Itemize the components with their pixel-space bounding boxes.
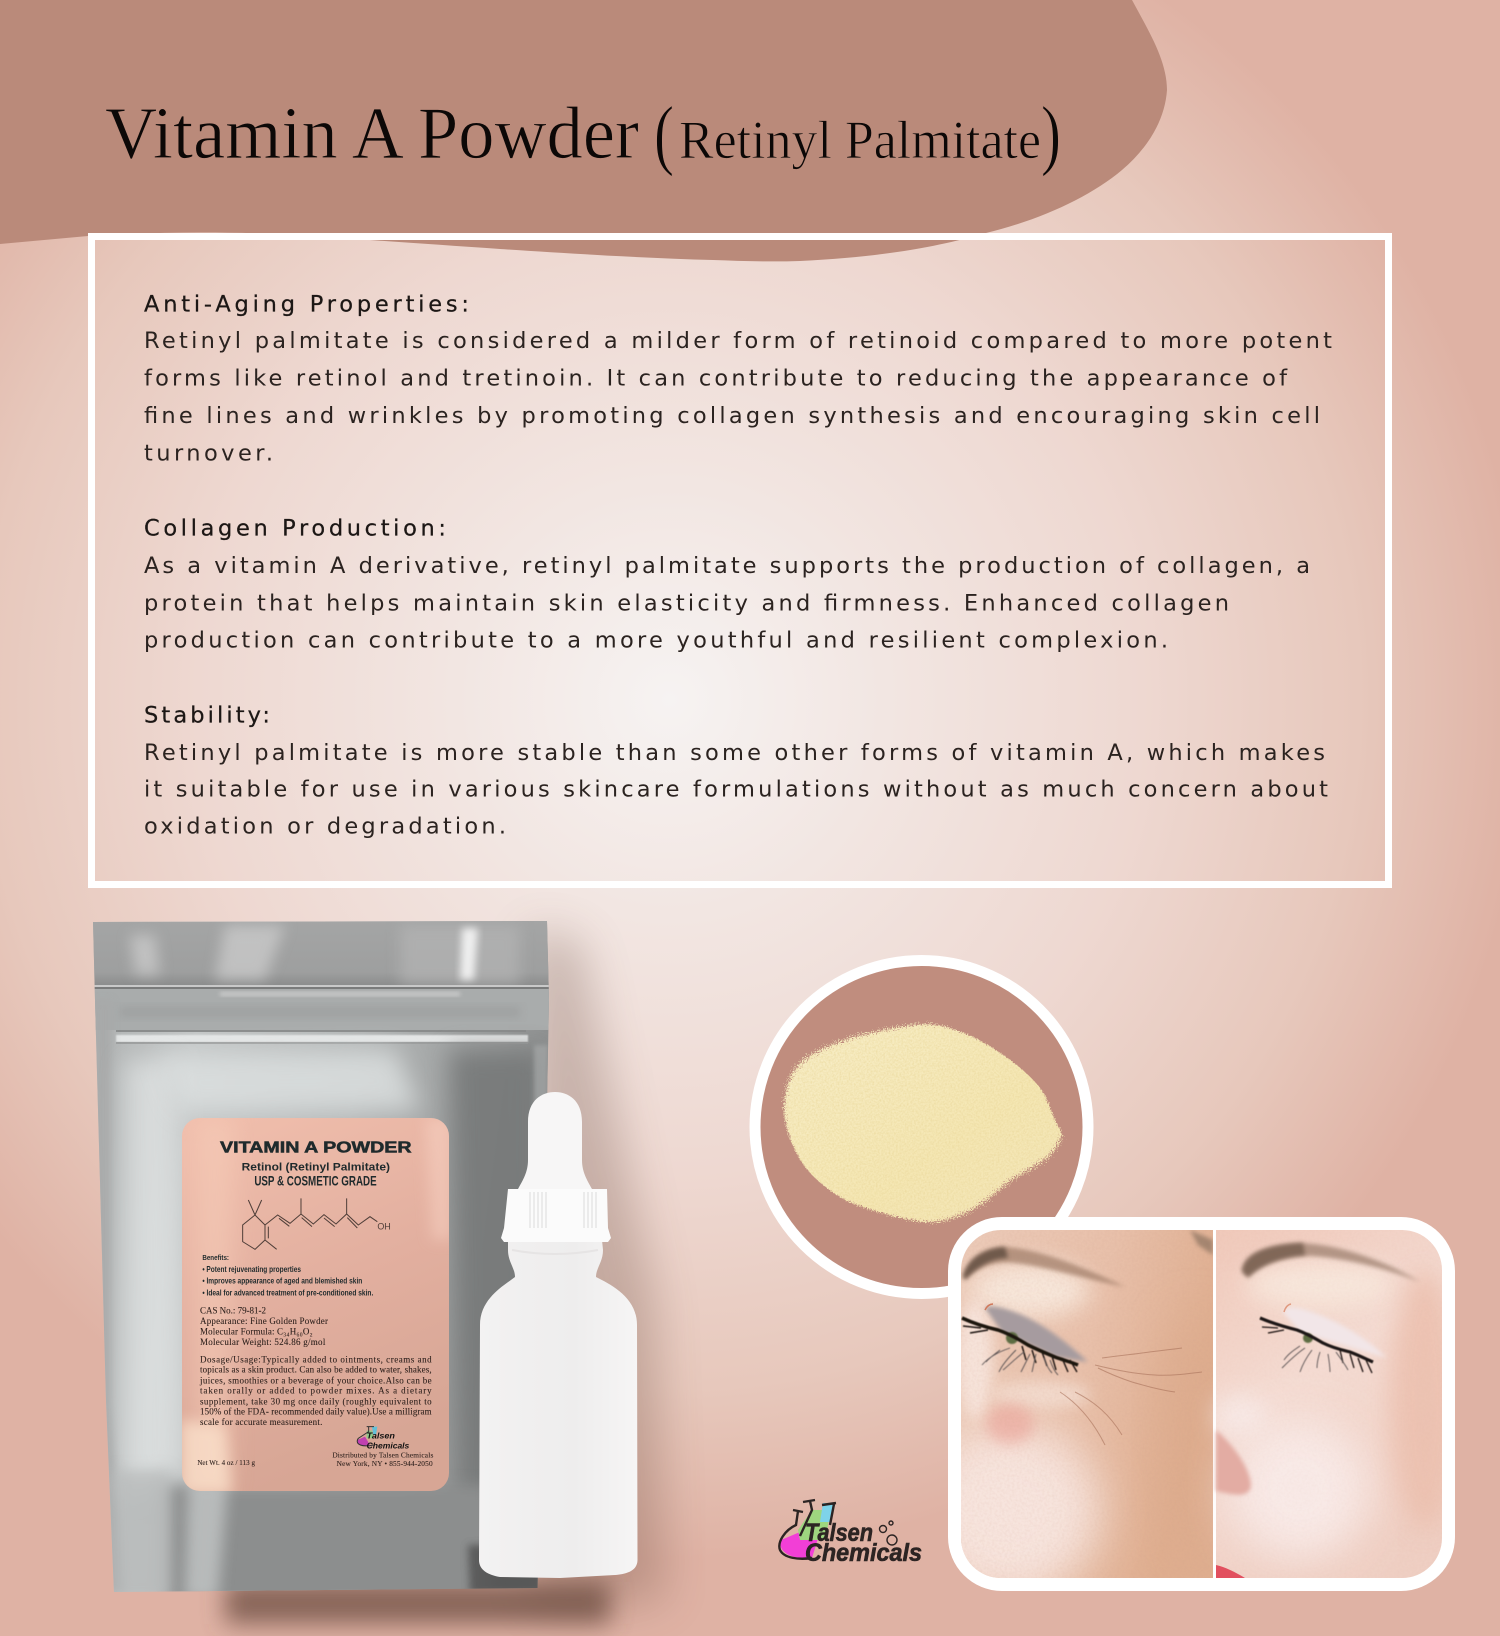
pouch label: Appearance: Fine Golden Powder bbox=[200, 1316, 328, 1326]
after: smooth skin bbox=[1214, 1230, 1460, 1578]
title: Vitamin A Powder bbox=[105, 93, 639, 175]
molecule diagram bbox=[243, 1198, 391, 1249]
label logo: Talsen bbox=[367, 1430, 395, 1440]
pouch label: Distributed by Talsen Chemicals bbox=[332, 1450, 433, 1459]
section: stability: it suitable for use in various skincare formulations without as much concern about bbox=[144, 776, 1328, 802]
Talsen Chemicals logo: Chemicals bbox=[805, 1539, 922, 1567]
section: anti-aging properties bbox=[144, 292, 1332, 466]
section: anti-aging properties: forms like retinol and tretinoin. It can contribute to reducing the appearance of bbox=[144, 366, 1288, 392]
pouch label: • Potent rejuvenating properties bbox=[202, 1264, 301, 1274]
section: stability: Retinyl palmitate is more stable than some other forms of vitamin A, which makes bbox=[144, 740, 1325, 766]
header blob bbox=[0, 0, 1167, 261]
powder circle bbox=[755, 960, 1088, 1294]
pouch label bbox=[180, 1118, 452, 1495]
section: collagen production: production can contribute to a more youthful and resilient complexion. bbox=[144, 628, 1168, 654]
pouch label: juices, smoothies or a beverage of your choice.Also can be bbox=[199, 1375, 432, 1385]
section: anti-aging properties: Retinyl palmitate is considered a milder form of retinoid compared to more potent bbox=[144, 328, 1332, 354]
pouch label: USP & COSMETIC GRADE bbox=[254, 1173, 377, 1188]
before and after skin photo bbox=[920, 1217, 1460, 1595]
text panel frame bbox=[92, 236, 1388, 884]
section: collagen production: Collagen Production: bbox=[144, 516, 446, 542]
dropper bottle bbox=[479, 1092, 638, 1578]
pouch label: Benefits: bbox=[202, 1253, 229, 1262]
logo flasks bbox=[779, 1500, 836, 1559]
section: anti-aging properties: turnover. bbox=[144, 440, 273, 466]
pouch label: Molecular Weight: 524.86 g/mol bbox=[200, 1337, 326, 1347]
pouch label: Retinol (Retinyl Palmitate) bbox=[242, 1162, 390, 1174]
molecule diagram: OH bbox=[377, 1221, 391, 1231]
pouch label: • Improves appearance of aged and blemished skin bbox=[202, 1276, 362, 1286]
pouch label: 150% of the FDA- recommended daily value).Use a milligram bbox=[200, 1407, 432, 1417]
pouch label: CAS No.: 79-81-2 bbox=[200, 1305, 266, 1315]
label logo bbox=[357, 1427, 409, 1450]
foil pouch bbox=[90, 921, 550, 1610]
section: anti-aging properties: fine lines and wrinkles by promoting collagen synthesis and encouraging skin cell bbox=[144, 403, 1320, 429]
section: collagen production: protein that helps maintain skin elasticity and firmness. Enhanced collagen bbox=[144, 590, 1229, 616]
pouch label: Dosage/Usage:Typically added to ointments, creams and bbox=[200, 1354, 432, 1364]
section: collagen production bbox=[144, 516, 1310, 654]
pouch label: taken orally or added to powder mixes. As a dietary bbox=[200, 1386, 432, 1396]
title: ( bbox=[654, 90, 674, 177]
before: aged skin bbox=[961, 1230, 1213, 1578]
label logo: Chemicals bbox=[367, 1440, 409, 1450]
pouch label: scale for accurate measurement. bbox=[200, 1417, 322, 1427]
title: Retinyl Palmitate bbox=[679, 110, 1041, 170]
pouch label: • Ideal for advanced treatment of pre-conditioned skin. bbox=[202, 1287, 373, 1297]
section: stability bbox=[144, 702, 1328, 840]
pouch label: New York, NY • 855-944-2050 bbox=[337, 1459, 433, 1468]
Talsen Chemicals logo: Talsen bbox=[805, 1519, 873, 1547]
title: ) bbox=[1041, 90, 1061, 177]
pouch label: supplement, take 30 mg once daily (roughly equivalent to bbox=[200, 1396, 432, 1406]
pouch label: Net Wt. 4 oz / 113 g bbox=[197, 1459, 255, 1467]
Talsen Chemicals logo bbox=[779, 1500, 922, 1567]
logo bubbles bbox=[880, 1521, 897, 1545]
section: stability: Stability: bbox=[144, 702, 270, 728]
pouch label: VITAMIN A POWDER bbox=[220, 1140, 412, 1157]
before: lashes bbox=[962, 1318, 1078, 1375]
product shadow bbox=[225, 930, 665, 1624]
pouch label: Molecular Formula: C₃₄H₆₀O₂ bbox=[200, 1326, 313, 1336]
pouch label: topicals as a skin product. Can also be added to water, shakes, bbox=[200, 1365, 432, 1375]
after: lashes bbox=[1260, 1318, 1373, 1373]
section: anti-aging properties: Anti-Aging Properties: bbox=[144, 292, 469, 318]
powder pile bbox=[784, 1024, 1062, 1222]
section: collagen production: As a vitamin A derivative, retinyl palmitate supports the production of collagen, a bbox=[144, 553, 1310, 579]
title bbox=[105, 90, 1061, 177]
section: stability: oxidation or degradation. bbox=[144, 814, 506, 840]
